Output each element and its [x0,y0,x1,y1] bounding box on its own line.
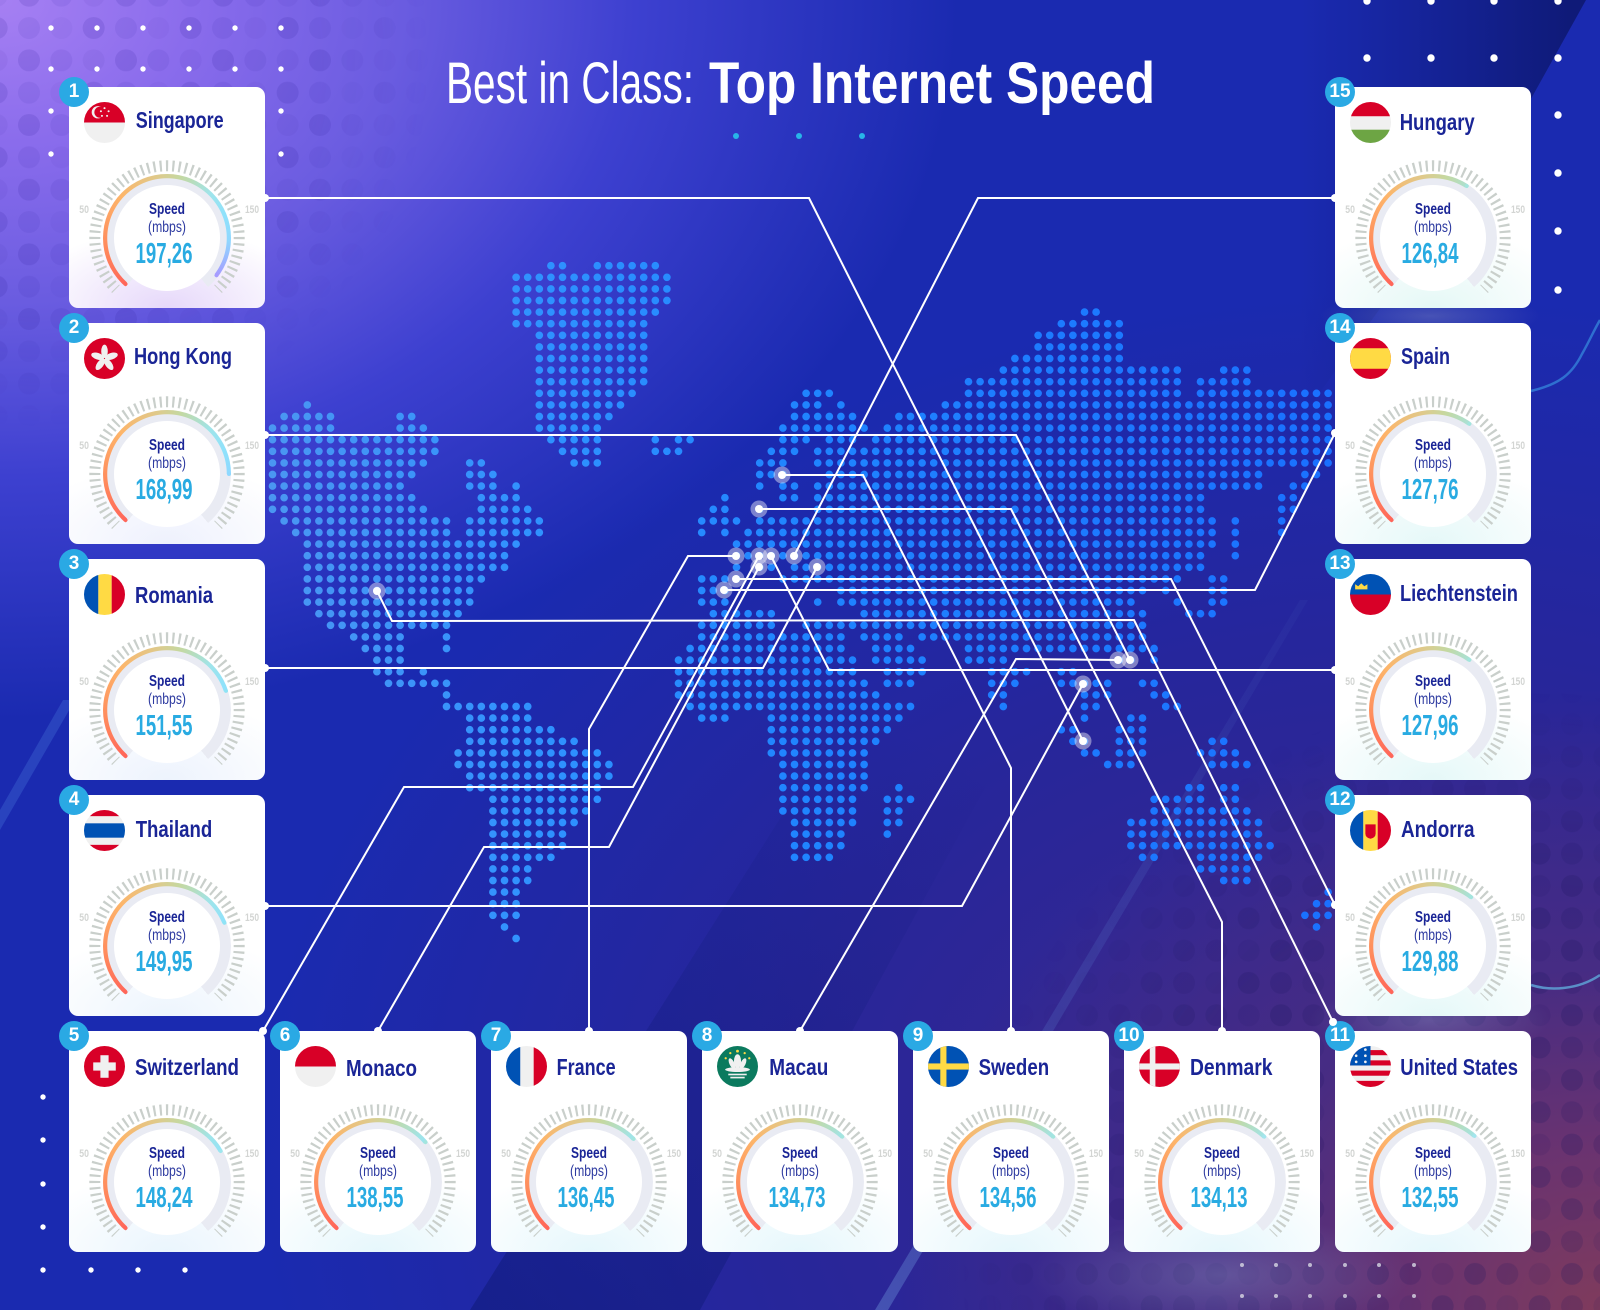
labels: 126,84 [1402,238,1458,270]
labels [79,816,259,1001]
rank 8: 8 [702,1025,712,1046]
flag: Spain [1350,338,1391,379]
labels [1335,795,1531,1016]
card: Romania [69,559,265,780]
labels: 150 [1511,204,1525,216]
labels: Hong Kong [134,343,232,369]
rank 2: 2 [69,317,79,338]
rank 1 [59,77,89,107]
labels: Monaco [346,1055,417,1081]
labels: 127,76 [1402,474,1458,506]
labels [1124,1031,1320,1252]
labels: 50 [1345,912,1355,924]
gauge [103,174,231,291]
title: Best in Class: [446,51,694,116]
card: United States [1335,1031,1531,1252]
flag: Monaco [295,1046,336,1087]
labels: 150 [245,676,259,688]
gauge [1369,882,1497,999]
labels: (mbps) [1414,691,1452,708]
labels [923,1054,1103,1237]
labels: (mbps) [148,455,186,472]
labels: (mbps) [1414,927,1452,944]
card: Singapore [69,87,265,308]
labels: 50 [1345,204,1355,216]
card: Spain [1335,323,1531,544]
labels: 150 [1511,676,1525,688]
rank 7 [481,1021,511,1051]
rank 5 [59,1021,89,1051]
labels: 150 [245,204,259,216]
card: France [491,1031,687,1252]
labels [79,582,259,765]
labels: 50 [1345,1148,1355,1160]
flag: Switzerland [84,1046,125,1087]
card: Hong Kong [69,323,265,544]
rank 10: 10 [1118,1025,1140,1046]
labels: Speed [782,1145,818,1162]
labels [79,1054,259,1237]
rank 9: 9 [913,1025,923,1046]
labels: Romania [135,582,213,608]
rank 1: 1 [69,81,79,102]
flag: Andorra [1350,810,1391,851]
card: Switzerland [69,1031,265,1252]
labels: 151,55 [136,710,192,742]
labels: (mbps) [148,1163,186,1180]
labels: 150 [245,1148,259,1160]
labels: (mbps) [148,691,186,708]
labels: 150 [1300,1148,1314,1160]
flag: Romania [84,574,125,615]
labels: 168,99 [136,474,192,506]
labels [712,1054,892,1237]
rank 4 [59,785,89,815]
labels: Andorra [1401,816,1475,842]
labels: Speed [149,201,185,218]
rank 13: 13 [1329,553,1351,574]
labels: 150 [1511,440,1525,452]
labels: 149,95 [136,946,192,978]
labels: 50 [501,1148,511,1160]
labels: Switzerland [135,1054,239,1080]
gauge [1369,174,1497,291]
flag: Hungary [1350,102,1391,143]
rank 10 [1114,1021,1144,1051]
rank 14: 14 [1329,317,1351,338]
rank 5: 5 [69,1025,79,1046]
flag: United States [1350,1046,1391,1087]
labels: Speed [1415,1145,1451,1162]
rank 8 [692,1021,722,1051]
rank 11 [1325,1021,1355,1051]
labels: Speed [1204,1145,1240,1162]
rank 15: 15 [1329,81,1351,102]
labels: Speed [1415,909,1451,926]
labels: (mbps) [1414,1163,1452,1180]
labels: Macau [769,1054,828,1080]
rank 6 [270,1021,300,1051]
labels: 150 [1089,1148,1103,1160]
labels: 150 [1511,1148,1525,1160]
labels: 50 [923,1148,933,1160]
labels: Speed [360,1145,396,1162]
rank 3 [59,549,89,579]
card: Monaco [280,1031,476,1252]
labels: 150 [245,440,259,452]
labels: (mbps) [1414,455,1452,472]
flag: Liechtenstein [1350,574,1391,615]
rank 6: 6 [280,1025,290,1046]
labels [501,1054,681,1237]
rank 9 [903,1021,933,1051]
labels: Speed [149,673,185,690]
card: Andorra [1335,795,1531,1016]
labels: United States [1400,1054,1518,1080]
labels: 197,26 [136,238,192,270]
labels: 134,73 [768,1182,826,1214]
labels: Hungary [1400,109,1475,135]
labels: 50 [79,1148,89,1160]
card: Liechtenstein [1335,559,1531,780]
flag: France [506,1046,547,1087]
labels: (mbps) [148,219,186,236]
rank 3: 3 [69,553,79,574]
gauge [103,410,231,527]
card: Denmark [1124,1031,1320,1252]
labels: Denmark [1190,1054,1273,1080]
labels [1335,559,1531,780]
labels: (mbps) [148,927,186,944]
labels: 50 [79,440,89,452]
labels: Speed [571,1145,607,1162]
gauge [947,1118,1075,1235]
gauge [1158,1118,1286,1235]
labels [1335,323,1531,544]
labels: Sweden [979,1054,1049,1080]
labels [79,107,259,293]
card: Sweden [913,1031,1109,1252]
card: Macau [702,1031,898,1252]
labels: 50 [290,1148,300,1160]
labels [1335,1031,1531,1252]
labels: Spain [1401,343,1450,369]
labels: Speed [1415,201,1451,218]
rank 11: 11 [1330,1025,1350,1046]
labels: 50 [712,1148,722,1160]
rank 14 [1325,313,1355,343]
labels: 50 [79,912,89,924]
gauge [314,1118,442,1235]
rank 4: 4 [69,789,79,810]
labels: (mbps) [1203,1163,1241,1180]
gauge [103,882,231,999]
gauge [1369,410,1497,527]
rank 7: 7 [491,1025,501,1046]
labels [79,343,259,529]
gauge [1369,646,1497,763]
labels: 136,45 [558,1182,614,1214]
flag: Thailand [84,810,125,851]
labels [290,1055,470,1237]
gauge [1369,1118,1497,1235]
card: Hungary [1335,87,1531,308]
title: Top Internet Speed [709,51,1155,116]
labels: 129,88 [1402,946,1458,978]
labels: 150 [878,1148,892,1160]
labels: 150 [667,1148,681,1160]
labels: 127,96 [1402,710,1458,742]
labels: Speed [149,909,185,926]
labels: France [557,1054,616,1080]
flag: Singapore [84,102,125,143]
labels: (mbps) [781,1163,819,1180]
rank 2 [59,313,89,343]
rank 12: 12 [1329,789,1351,810]
flag: Macau [717,1046,758,1087]
card: Thailand [69,795,265,1016]
gauge [103,646,231,763]
labels: Liechtenstein [1400,580,1518,606]
labels: 50 [79,676,89,688]
flag: Sweden [928,1046,969,1087]
gauge [525,1118,653,1235]
labels: Thailand [136,816,212,842]
labels: Speed [149,437,185,454]
labels: Speed [1415,437,1451,454]
rank 12 [1325,785,1355,815]
labels [1335,87,1531,308]
labels: Speed [1415,673,1451,690]
rank 15 [1325,77,1355,107]
labels: 132,55 [1402,1182,1458,1214]
gauge [736,1118,864,1235]
labels: 148,24 [136,1182,192,1214]
labels: 138,55 [346,1182,404,1214]
gauge [103,1118,231,1235]
labels: 50 [1345,440,1355,452]
labels: 150 [456,1148,470,1160]
labels: 50 [1134,1148,1144,1160]
labels: Speed [149,1145,185,1162]
labels: 150 [1511,912,1525,924]
labels: 50 [79,204,89,216]
labels: 50 [1345,676,1355,688]
title [446,51,1155,139]
labels: (mbps) [1414,219,1452,236]
labels: Singapore [136,107,224,133]
rank 13 [1325,549,1355,579]
labels: (mbps) [570,1163,608,1180]
labels: 134,13 [1190,1182,1248,1214]
flag: Hong Kong [84,338,125,379]
labels: (mbps) [359,1163,397,1180]
labels: 150 [245,912,259,924]
labels: Speed [993,1145,1029,1162]
labels: 134,56 [980,1182,1036,1214]
labels: (mbps) [992,1163,1030,1180]
flag: Denmark [1139,1046,1180,1087]
